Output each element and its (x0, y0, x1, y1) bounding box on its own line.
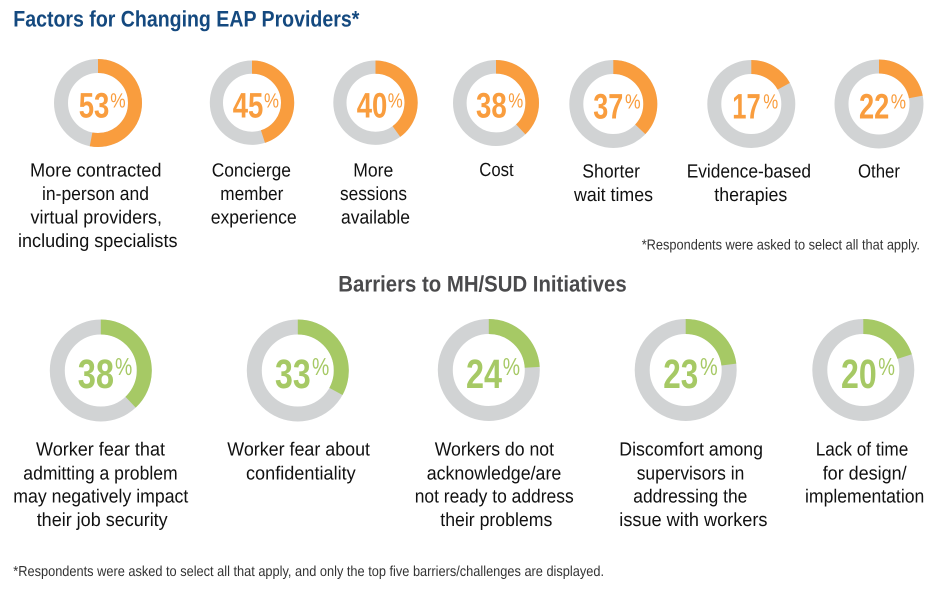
label: evidence-based therapies: Evidence-based (687, 161, 811, 182)
label: concierge member experience (211, 161, 297, 228)
label: worker fear job security: Worker fear that (36, 440, 166, 461)
donut: 53%: 53 (79, 86, 109, 126)
donut: 40%: 40 (357, 86, 387, 126)
donut: 53%: % (110, 89, 126, 112)
donut: 24% not ready: 24 (466, 351, 502, 397)
label: shorter wait times (573, 161, 653, 206)
donut: 38% cost: % (508, 89, 523, 112)
donut: 38% cost: 38 (476, 86, 507, 126)
label: more contracted providers: in-person and (42, 184, 149, 205)
label: shorter wait times: Shorter (582, 161, 641, 182)
label: worker fear job security: their job security (37, 510, 168, 531)
label: discomfort among supervisors (619, 440, 768, 531)
panel: barriers to initiatives (13, 326, 924, 531)
donut: 38% job security (57, 327, 144, 414)
donut: 23% supervisors: 23 (663, 351, 698, 397)
heading: Barriers to MH/SUD Initiatives: Barriers to MH/SUD Initiatives (338, 272, 627, 297)
label: discomfort among supervisors: supervisors in (637, 463, 744, 484)
label: more sessions available: sessions (340, 184, 407, 205)
footnote: select all that apply: *Respondents were asked to select all that apply. (642, 237, 920, 253)
label: worker fear job security: admitting a problem (23, 463, 178, 484)
title: Factors for Changing EAP Providers: Factors for Changing EAP Providers* (13, 7, 360, 32)
donut: 17% (714, 67, 788, 141)
donut: 37% (576, 67, 650, 141)
donut: 20% lack of time: % (878, 354, 895, 381)
label: cost: Cost (479, 160, 514, 181)
donut: 22% other: 22 (859, 87, 889, 127)
label: concierge member experience: Concierge (212, 161, 291, 182)
donut: 38% job security: % (115, 354, 132, 381)
donut: 17%: 17 (732, 87, 761, 127)
label: concierge member experience: experience (211, 208, 297, 228)
label: workers do not acknowledge: their problems (440, 510, 552, 531)
donut: 33% confidentiality (254, 327, 341, 414)
donut: 24% not ready: % (503, 354, 520, 381)
label: lack of time: implementation (805, 487, 924, 508)
donut: 40% (340, 67, 411, 138)
label: worker fear job security: may negatively impact (13, 487, 189, 508)
label: discomfort among supervisors: issue with workers (619, 510, 768, 531)
panel: factors for changing providers (18, 66, 916, 252)
label: workers do not acknowledge: not ready to address (415, 487, 574, 508)
donut: 45% (216, 67, 288, 138)
label: more sessions available: available (341, 208, 410, 228)
label: lack of time (805, 440, 924, 508)
donut: 23% supervisors (642, 326, 729, 414)
label: other: Other (858, 161, 901, 182)
label: evidence-based therapies (687, 161, 811, 206)
donut: 37%: % (625, 90, 641, 113)
donut: 22% other (842, 66, 916, 142)
label: workers do not acknowledge: acknowledge/are (427, 463, 561, 484)
label: evidence-based therapies: therapies (714, 185, 787, 206)
donut: 33% confidentiality: % (312, 354, 329, 381)
donut: 20% lack of time: 20 (841, 351, 877, 397)
donut: 22% other: % (891, 90, 906, 113)
donut: 17%: % (763, 90, 778, 113)
label: lack of time: for design/ (823, 463, 907, 484)
label: lack of time: Lack of time (816, 440, 908, 461)
donut: 38% job security: 38 (78, 351, 114, 397)
label: worker fear job security (13, 440, 189, 531)
footnote: top five barriers: *Respondents were asked to select all that apply, and only the top five barriers/challenges are displayed. (13, 564, 604, 580)
donut: 20% lack of time (820, 326, 907, 414)
label: more contracted providers: virtual providers, (30, 208, 162, 228)
label: shorter wait times: wait times (573, 185, 653, 206)
label: more contracted providers: More contracted (30, 161, 162, 182)
donut: 38% cost (460, 67, 532, 139)
label: worker fear confidentiality: confidentiality (246, 463, 356, 484)
label: workers do not acknowledge: Workers do not (435, 440, 555, 461)
label: more contracted providers (18, 161, 178, 252)
donut: 45%: 45 (233, 86, 263, 126)
label: worker fear confidentiality (227, 440, 371, 484)
label: workers do not acknowledge (415, 440, 574, 531)
label: concierge member experience: member (220, 184, 284, 205)
donut: 40%: % (388, 89, 403, 112)
label: discomfort among supervisors: addressing the (633, 487, 747, 508)
donut: 45%: % (264, 89, 279, 112)
donut: 23% supervisors: % (700, 354, 718, 381)
donut: 33% confidentiality: 33 (275, 351, 311, 397)
label: more contracted providers: including specialists (18, 231, 178, 252)
donut: 53% (61, 66, 135, 140)
label: more sessions available (340, 161, 410, 228)
donut: 37%: 37 (593, 87, 623, 127)
label: worker fear confidentiality: Worker fear about (227, 440, 371, 461)
donut: 24% not ready (445, 326, 532, 414)
label: more sessions available: More (353, 161, 393, 182)
label: discomfort among supervisors: Discomfort among (619, 440, 763, 461)
